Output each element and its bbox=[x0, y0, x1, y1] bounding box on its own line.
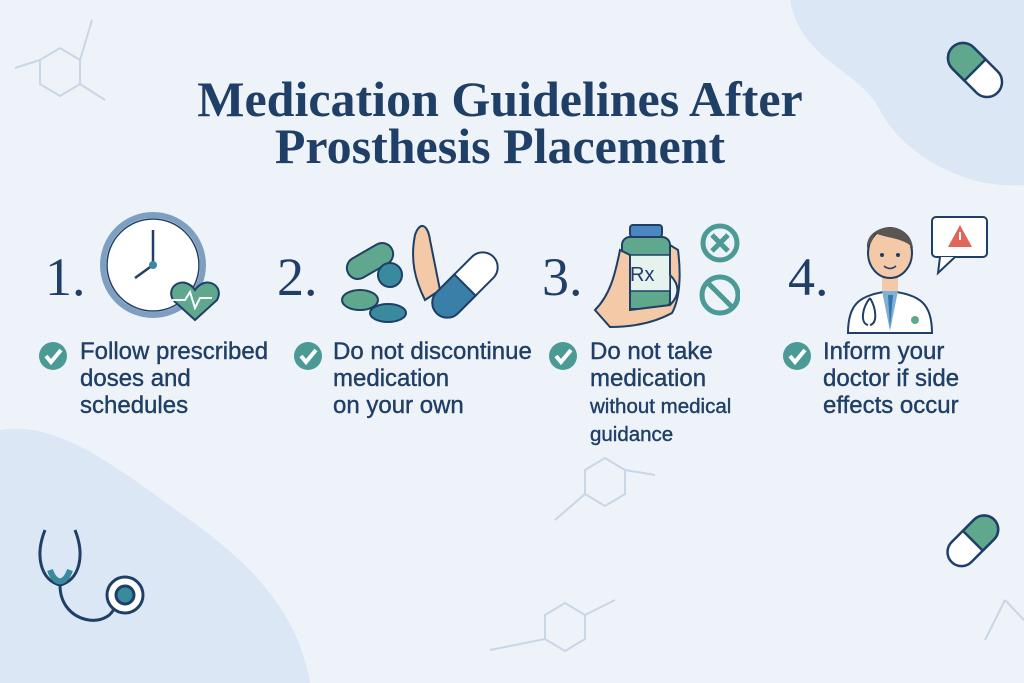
icon: clock with heart bbox=[100, 212, 220, 322]
item 1 bbox=[39, 212, 268, 419]
icon: hand with Rx bottle: Rx bbox=[630, 264, 654, 286]
icon: pills and hand bbox=[341, 224, 499, 323]
number 1: 1. bbox=[45, 247, 86, 307]
text 2: medication bbox=[333, 365, 449, 392]
item 3 bbox=[542, 224, 740, 446]
text 3: guidance bbox=[590, 423, 673, 446]
number 3: 3. bbox=[542, 247, 582, 307]
icon: doctor with warning bubble bbox=[847, 216, 988, 334]
item 2 bbox=[277, 224, 532, 419]
title: Prosthesis Placement bbox=[275, 118, 725, 174]
icon: capsule top right bbox=[946, 42, 1004, 98]
item 4 bbox=[783, 216, 988, 419]
text 4: doctor if side bbox=[823, 365, 959, 392]
title bbox=[197, 71, 803, 174]
number 4: 4. bbox=[788, 247, 828, 307]
text 3: without medical bbox=[590, 395, 731, 418]
icon: stethoscope bbox=[38, 530, 144, 622]
text 4: effects occur bbox=[823, 392, 959, 419]
title: Medication Guidelines After bbox=[197, 71, 803, 127]
icon: capsule bottom right bbox=[946, 514, 1000, 568]
text 2: Do not discontinue bbox=[333, 338, 532, 365]
text 1: Follow prescribed doses and schedules bbox=[80, 338, 268, 419]
text 2 bbox=[294, 338, 532, 419]
text 4: Inform your bbox=[823, 338, 944, 365]
text 3: Do not take bbox=[590, 338, 713, 365]
text 3 bbox=[549, 338, 731, 446]
text 4 bbox=[783, 338, 959, 419]
number 2: 2. bbox=[277, 247, 318, 307]
text 2: on your own bbox=[333, 392, 464, 419]
text 3: medication bbox=[590, 365, 706, 392]
icon: hand with Rx bottle bbox=[594, 224, 740, 328]
